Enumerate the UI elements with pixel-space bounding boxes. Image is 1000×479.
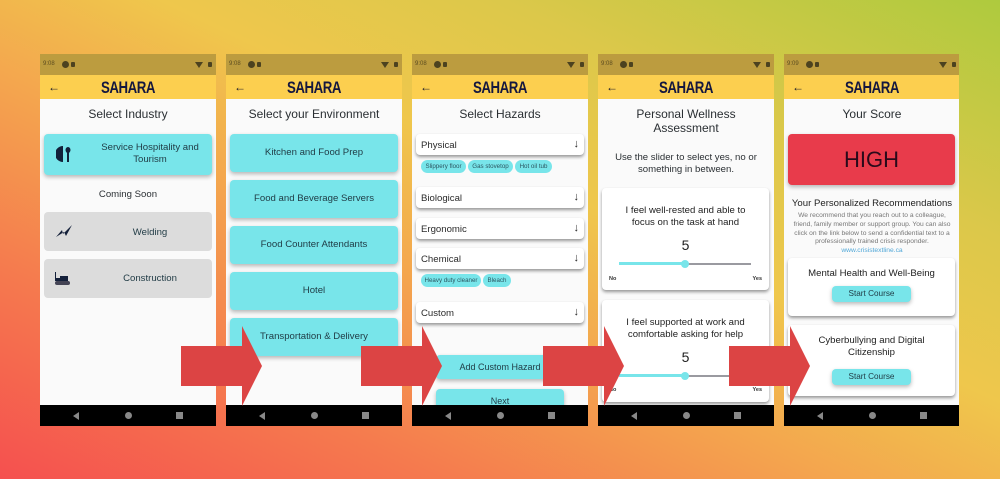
dropdown: chemical: ↓ [574, 252, 579, 264]
card: question one [602, 188, 769, 290]
score card: high [788, 134, 955, 185]
card: transportation: Transportation & Delivery [260, 331, 368, 342]
chips: physical hazards [421, 160, 552, 173]
chips: physical hazards: Slippery floor [425, 163, 462, 170]
app header with logo: SAHARA [845, 78, 899, 97]
instructions: something in between. [638, 164, 734, 175]
card: counter attendants: Food Counter Attendants [261, 239, 367, 250]
icon: welding spark [56, 225, 72, 237]
card: question two: comfortable asking for help [628, 329, 743, 340]
chips: chemical hazards: Bleach [488, 277, 506, 284]
heading: Your Score [843, 107, 901, 121]
dropdown: chemical [416, 248, 584, 269]
status bar: 9:08 [43, 61, 55, 67]
dropdown: ergonomic [416, 218, 584, 239]
button: next: Next [491, 396, 509, 406]
status bar [40, 54, 216, 75]
card: hotel: Hotel [303, 285, 325, 296]
card: welding: Welding [133, 227, 167, 238]
heading [636, 107, 736, 134]
phone: select hazards [412, 54, 588, 426]
app header with logo: SAHARA [287, 78, 341, 97]
phone: select environment [226, 54, 402, 426]
card: mental health course [788, 258, 955, 316]
app header with logo [412, 75, 588, 99]
arrow 4 [729, 326, 810, 406]
card: question two: Yes [753, 387, 762, 393]
instructions [615, 152, 757, 175]
card: question two [602, 300, 769, 402]
slider [619, 260, 751, 268]
slider [619, 372, 729, 380]
app header with logo: ← [420, 80, 432, 94]
instructions: Use the slider to select yes, no or [615, 152, 757, 163]
app header with logo: SAHARA [659, 78, 713, 97]
heading: Assessment [653, 120, 719, 134]
dropdown: physical [416, 134, 584, 155]
chips: chemical hazards: Heavy duty cleaner [425, 277, 477, 284]
dropdown: biological [416, 187, 584, 208]
arrow 1 [181, 326, 262, 406]
card: service hospitality: Service Hospitality and Tourism [101, 142, 199, 165]
card: hotel [230, 272, 398, 310]
app header with logo [40, 75, 216, 99]
coming soon label: Coming Soon [99, 189, 157, 200]
card: construction: Construction [123, 273, 177, 284]
card: kitchen [230, 134, 398, 172]
status bar: 9:09 [787, 61, 799, 67]
card: construction [44, 259, 212, 298]
heading: Select Industry [88, 107, 168, 121]
card: cyberbullying course: Cyberbullying and Digital [818, 335, 925, 346]
heading: Select your Environment [249, 107, 379, 121]
score card: high: HIGH [844, 147, 899, 172]
button: start course: Start Course [849, 372, 894, 381]
dropdown: biological: Biological [421, 193, 462, 204]
nav bar [412, 405, 588, 426]
chips: chemical hazards [421, 274, 511, 287]
card: question one: Yes [753, 276, 762, 282]
recommendations text: www.crisistextline.ca [841, 247, 903, 254]
card: kitchen: Kitchen and Food Prep [265, 147, 363, 158]
dropdown: ergonomic: Ergonomic [421, 224, 467, 235]
dropdown: custom [416, 302, 584, 323]
nav bar [226, 405, 402, 426]
recommendations text [794, 212, 950, 254]
button: start course: Start Course [849, 289, 894, 298]
card: transportation [230, 318, 398, 356]
recommendations text: friend, family member or support group. You can also [794, 221, 950, 228]
app header with logo: SAHARA [101, 78, 155, 97]
nav bar [784, 405, 959, 426]
app header with logo: ← [792, 80, 804, 94]
recommendations text: We recommend that you reach out to a colleague, [798, 212, 946, 219]
chips: physical hazards: Gas stovetop [472, 163, 509, 170]
dropdown: custom: Custom [421, 308, 454, 319]
recommendations heading: Your Personalized Recommendations [792, 198, 952, 209]
button: start course [832, 286, 911, 302]
app header with logo [598, 75, 774, 99]
dropdown: physical: ↓ [574, 138, 579, 150]
app header with logo [784, 75, 960, 99]
card: counter attendants [230, 226, 398, 264]
dropdown: biological: ↓ [574, 191, 579, 203]
phone: select industry [40, 54, 216, 426]
dropdown: ergonomic: ↓ [574, 222, 579, 234]
status bar: 9:08 [601, 61, 613, 67]
status bar: 9:08 [415, 61, 427, 67]
dropdown: custom: ↓ [574, 306, 579, 318]
button: add custom hazard [436, 355, 564, 379]
app header with logo: SAHARA [473, 78, 527, 97]
card: servers: Food and Beverage Servers [254, 193, 374, 204]
card: question two: 5 [682, 349, 689, 365]
dropdown: physical: Physical [421, 140, 457, 151]
icon: dining [56, 146, 70, 162]
icon: excavator [55, 272, 70, 285]
status bar [226, 54, 402, 75]
card: mental health course: Mental Health and Well-Being [808, 268, 935, 279]
recommendations text: professionally trained crisis responder. [815, 238, 929, 245]
app header with logo [226, 75, 402, 99]
card: question one: No [609, 276, 616, 282]
button: next [436, 389, 564, 413]
heading: Personal Wellness [636, 107, 736, 121]
card: question two: No [609, 387, 616, 393]
phone: your score [784, 54, 959, 426]
status bar [412, 54, 588, 75]
app header with logo: ← [48, 80, 60, 94]
arrow 3 [543, 326, 624, 406]
status bar: 9:08 [229, 61, 241, 67]
card: welding [44, 212, 212, 251]
button: start course [832, 369, 911, 385]
recommendations text: click on the link below to send a confidential text to a [794, 230, 950, 237]
card: question two: I feel supported at work and [626, 317, 745, 328]
app header with logo: ← [606, 80, 618, 94]
button: add custom hazard: Add Custom Hazard [459, 362, 541, 372]
app header with logo: ← [234, 80, 246, 94]
nav bar [40, 405, 216, 426]
status bar [598, 54, 774, 75]
card: question one: I feel well-rested and able to [626, 205, 746, 216]
chips: physical hazards: Hot oil tub [520, 163, 547, 170]
card: cyberbullying course: Citizenship [848, 347, 895, 358]
arrow 2 [361, 326, 442, 406]
card: question one: focus on the task at hand [632, 217, 739, 228]
nav bar [598, 405, 774, 426]
card: question one: 5 [682, 237, 689, 253]
heading: Select Hazards [459, 107, 541, 121]
dropdown: chemical: Chemical [421, 254, 461, 265]
card: cyberbullying course [788, 325, 955, 396]
card: servers [230, 180, 398, 218]
card: service hospitality [44, 134, 212, 175]
phone: wellness assessment [598, 54, 774, 426]
status bar [784, 54, 960, 75]
